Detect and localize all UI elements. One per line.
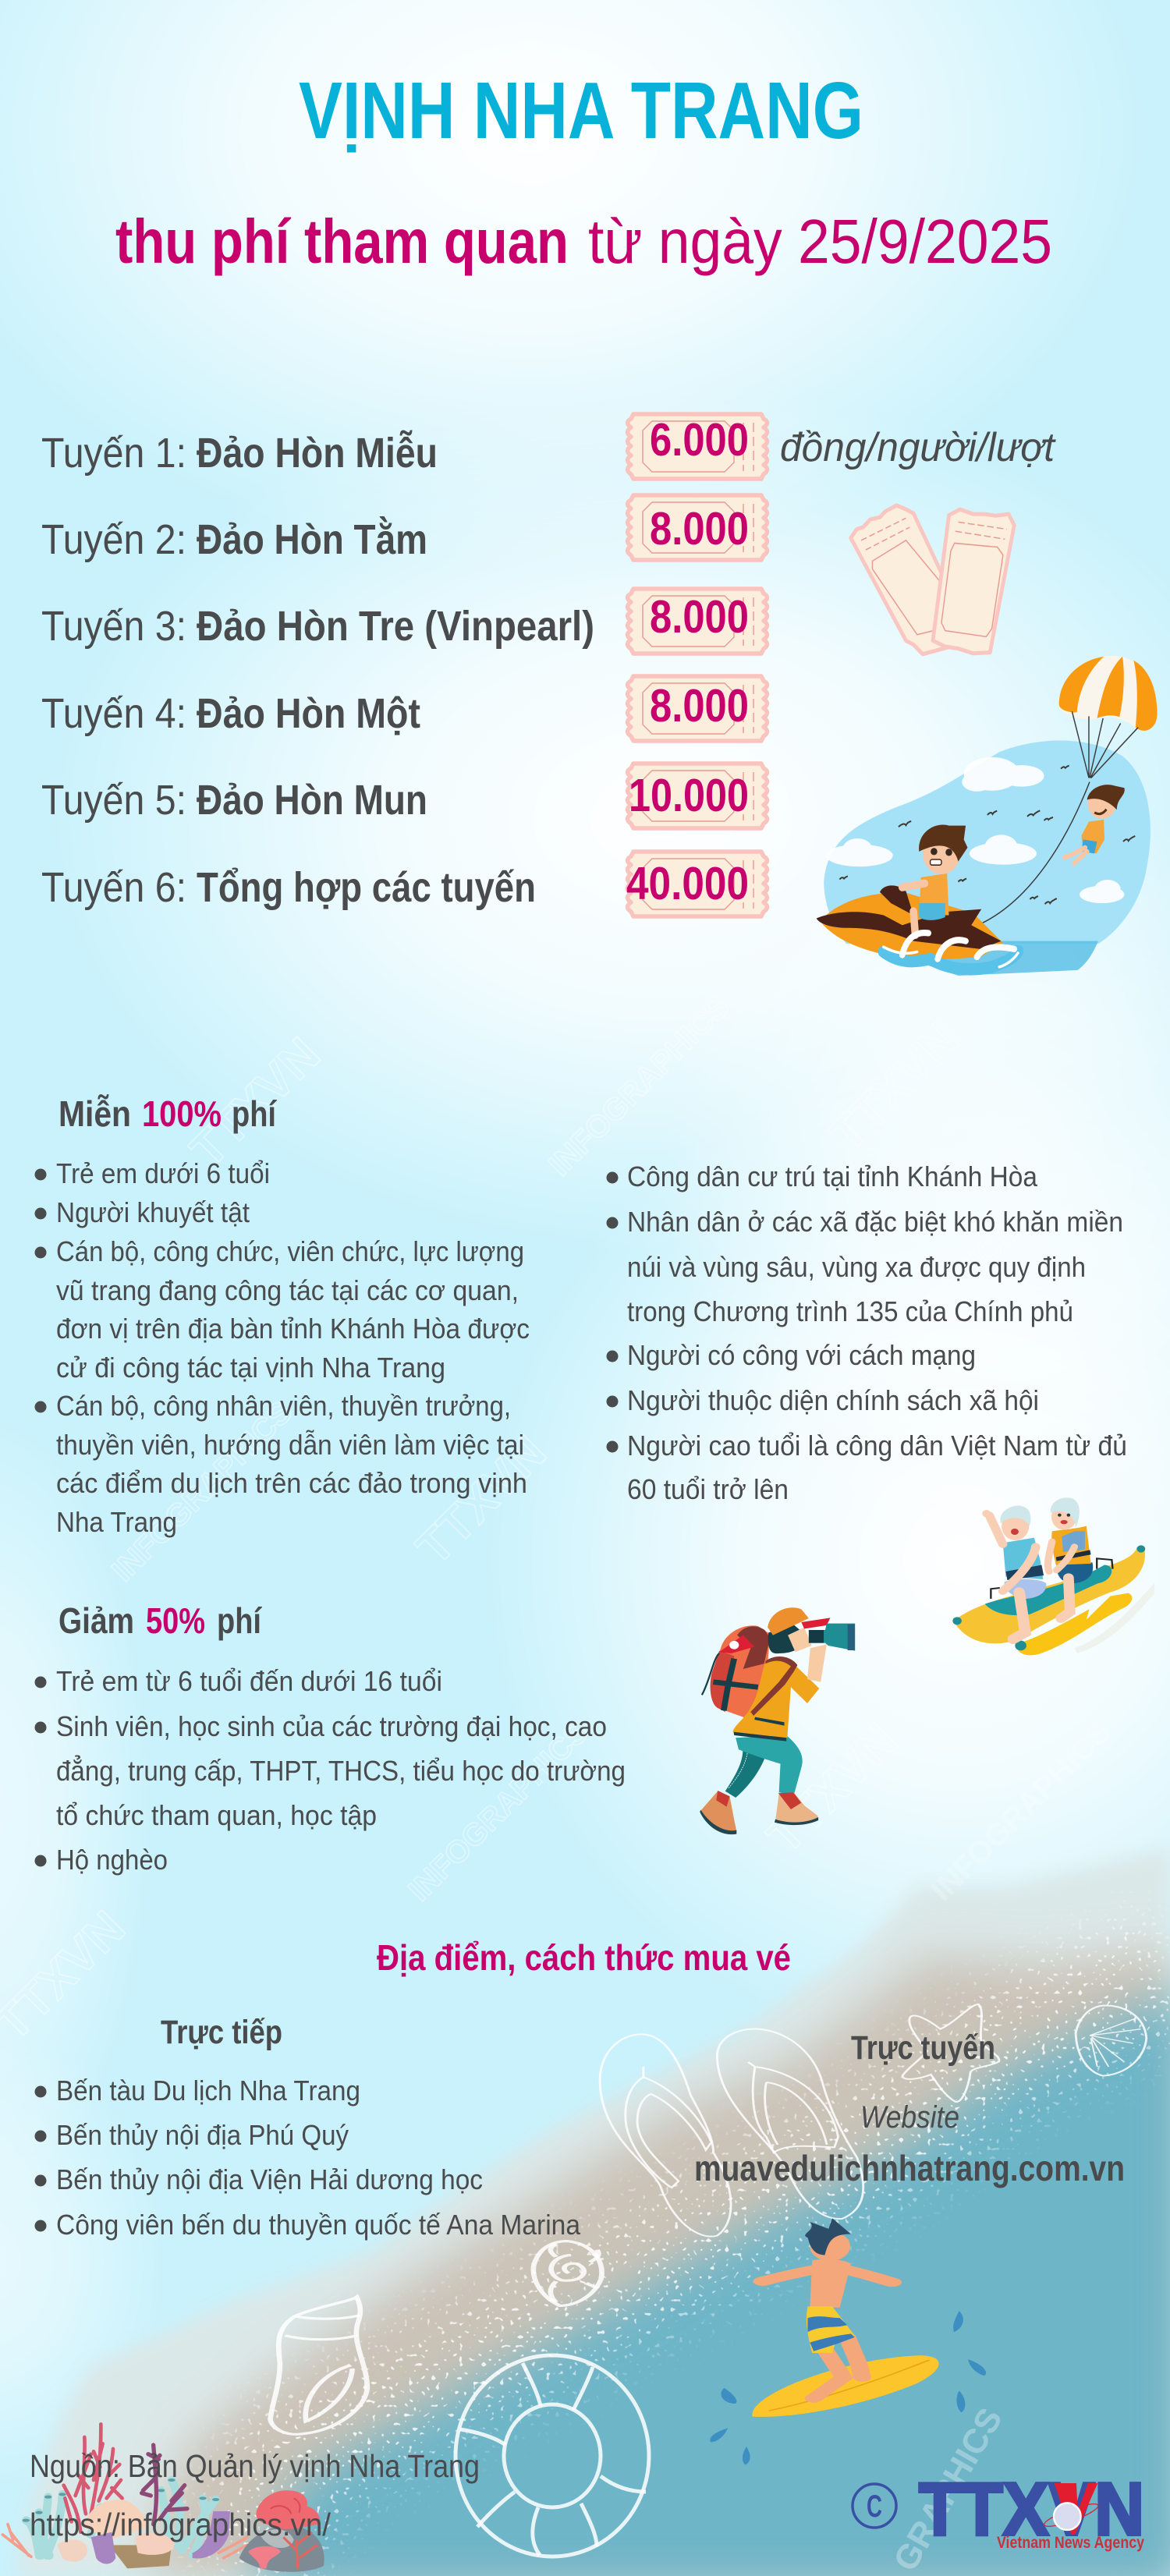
list: right column: Người thuộc diện chính sách xã hội: [627, 1384, 1039, 1416]
list: 50% discount: Sinh viên, học sinh của các trường đại học, cao: [56, 1710, 607, 1742]
route 5: Đảo Hòn Mun: [197, 777, 427, 824]
list: 50% discount: Trẻ em từ 6 tuổi đến dưới 16 tuổi: [56, 1665, 442, 1697]
route 1: [41, 430, 438, 477]
list: 50% discount: Hộ nghèo: [56, 1844, 168, 1876]
ticket: 6.000: [627, 414, 768, 479]
rider right: [1048, 1497, 1093, 1618]
purple tubes: [91, 2511, 230, 2564]
route 4: [41, 690, 420, 737]
subtitle: từ ngày 25/9/2025: [588, 207, 1052, 276]
watermarks: TTXVN: [180, 1027, 331, 1178]
wordmark: TTXVN: [919, 2468, 1144, 2551]
list: right column: Người cao tuổi là công dân Việt Nam từ đủ: [627, 1430, 1127, 1462]
illustration: corals: [2, 2424, 324, 2572]
heading: 50% discount: [58, 1600, 263, 1641]
ticket: 8.000 route 3: [627, 589, 768, 654]
list: right column: [607, 1160, 1127, 1505]
jacket: [732, 1658, 819, 1738]
list: left column: các điểm du lịch trên các đảo trong vịnh: [56, 1467, 527, 1499]
list: direct: [34, 2075, 581, 2241]
route 3: [41, 603, 594, 650]
teal tubes left: [26, 2480, 216, 2556]
source: Nguồn: Bản Quản lý vịnh Nha Trang: [30, 2448, 480, 2484]
arm: [807, 1644, 827, 1682]
agency name: Vietnam News Agency: [997, 2534, 1144, 2552]
icon: spiral shell and conch: [270, 2241, 602, 2434]
grey rock: [239, 2525, 324, 2572]
shells and rock: [83, 2500, 148, 2540]
icon: flip flops and starfish and scallop: [600, 2004, 1147, 2237]
heading: 50% discount: phí: [217, 1600, 263, 1641]
purple branching coral: [142, 2445, 187, 2525]
illustration: jet ski and parasailing: [817, 656, 1158, 976]
subtitle: thu phí tham quan: [115, 207, 569, 276]
label: website: Website: [860, 2100, 959, 2135]
watermarks: GRAPHICS: [886, 2401, 1010, 2576]
rider left: [982, 1506, 1046, 1639]
ticket: 6.000: 6.000: [650, 414, 749, 466]
watermarks: INFOGRAPHICS: [105, 1394, 299, 1588]
parasailer: [1065, 785, 1125, 863]
list: left column: Người khuyết tật: [56, 1196, 250, 1228]
heading: Miễn: [58, 1093, 131, 1134]
route 2: [41, 516, 427, 563]
list: left column: cử đi công tác tại vịnh Nha Trang: [56, 1352, 445, 1384]
splash: [1075, 1583, 1154, 1653]
subtitle: [115, 207, 1052, 276]
route 3: Tuyến 3:: [41, 603, 186, 650]
route 6: Tuyến 6:: [41, 864, 186, 911]
waves: [884, 933, 1018, 969]
illustration: seniors on banana boat: [952, 1497, 1154, 1655]
backpack: [702, 1625, 770, 1720]
route 2: Đảo Hòn Tằm: [197, 516, 427, 563]
list: right column: trong Chương trình 135 của Chính phủ: [627, 1295, 1073, 1327]
banana body: [954, 1547, 1145, 1643]
list: left column: Nha Trang: [56, 1506, 177, 1538]
lower tube: [1016, 1593, 1132, 1655]
list: 50% discount: [34, 1665, 626, 1876]
front leg: [736, 1735, 803, 1795]
tube caps: [23, 2479, 219, 2522]
list: left column: [34, 1157, 530, 1538]
watermarks: TTXVN: [820, 1012, 970, 1162]
ticket: 8.000 route 3: 8.000: [650, 591, 749, 643]
heading: 50% discount: 50%: [146, 1600, 205, 1641]
list: right column: Công dân cư trú tại tỉnh Khánh Hòa: [627, 1160, 1038, 1192]
birds: [839, 766, 1135, 904]
logo: TTXVN: [853, 2468, 1144, 2552]
title: VỊNH NHA TRANG: [299, 66, 863, 155]
heading: where to buy: Địa điểm, cách thức mua vé: [377, 1937, 791, 1978]
heading: direct: Trực tiếp: [161, 2014, 282, 2051]
head and hair: [810, 2231, 850, 2261]
panel: routes and prices: [41, 414, 1056, 916]
sky blob: [824, 741, 1150, 944]
ticket: 8.000 route 4: 8.000: [650, 680, 749, 732]
heading: 50% discount: Giảm: [58, 1600, 134, 1641]
handles: [991, 1558, 1112, 1599]
route 3: Đảo Hòn Tre (Vinpearl): [197, 603, 594, 650]
surfboard: [752, 2355, 939, 2417]
route 4: Đảo Hòn Một: [197, 690, 420, 737]
ticket: 8.000 route 2: 8.000: [650, 503, 749, 555]
route 5: Tuyến 5:: [41, 777, 186, 824]
red coral blob: [256, 2490, 320, 2529]
list: right column: Người có công với cách mạng: [627, 1339, 976, 1371]
route 4: Tuyến 4:: [41, 690, 186, 737]
list: left column: Trẻ em dưới 6 tuổi: [56, 1157, 270, 1189]
list: right column: 60 tuổi trở lên: [627, 1473, 789, 1505]
heading: online: Trực tuyến: [851, 2029, 995, 2067]
route 6: Tổng hợp các tuyến: [197, 864, 536, 911]
copyright symbol: [853, 2484, 896, 2528]
copyright symbol: C: [867, 2489, 882, 2524]
list: direct: Bến tàu Du lịch Nha Trang: [56, 2075, 360, 2107]
ticket: 40.000: 40.000: [626, 858, 749, 909]
list: right column: Nhân dân ở các xã đặc biệt khó khăn miền: [627, 1206, 1123, 1238]
shorts: [807, 2306, 855, 2353]
clouds: [826, 757, 1124, 903]
heading: 100%: [142, 1093, 222, 1134]
jet ski: [817, 885, 1003, 961]
watermarks: INFOGRAPHICS: [402, 1714, 595, 1908]
heading: phí: [232, 1093, 278, 1134]
illustration: photographer: [700, 1607, 855, 1834]
droplets: [710, 2311, 986, 2464]
red V and globe: [1042, 2483, 1100, 2534]
boots: [700, 1791, 818, 1834]
route 2: Tuyến 2:: [41, 516, 186, 563]
parachute: [1059, 656, 1158, 778]
watermarks: TTXVN: [406, 1425, 557, 1575]
list: left column: đơn vị trên địa bàn tỉnh Khánh Hòa được: [56, 1313, 530, 1345]
watermarks: [0, 989, 1118, 2576]
ticket: 8.000 route 4: [627, 676, 768, 741]
list: left column: Cán bộ, công nhân viên, thuyền trưởng,: [56, 1390, 511, 1422]
ticket: 10.000: 10.000: [629, 770, 749, 821]
panel: 100% exemption: [34, 1093, 1127, 1538]
icon: two tickets: [851, 505, 1014, 654]
legs: [814, 2337, 862, 2398]
rope: [973, 782, 1090, 927]
url: infographics: https://infographics.vn/: [30, 2507, 332, 2542]
route 1: Tuyến 1:: [41, 430, 186, 477]
icon: swim ring: [456, 2355, 649, 2557]
list: direct: Bến thủy nội địa Viện Hải dương học: [56, 2163, 483, 2195]
watermarks: INFOGRAPHICS: [831, 1215, 1024, 1408]
list: left column: Cán bộ, công chức, viên chức, lực lượng: [56, 1235, 524, 1267]
sea strip: [921, 941, 1098, 976]
unit label: đồng/người/lượt: [780, 425, 1056, 470]
route 5: [41, 777, 427, 824]
list: direct: Công viên bến du thuyền quốc tế Ana Marina: [56, 2209, 581, 2241]
illustration: surfer: [710, 2218, 986, 2464]
head: [768, 1607, 830, 1653]
list: 50% discount: đẳng, trung cấp, THPT, THCS, tiểu học do trường: [56, 1754, 626, 1787]
ticket: 8.000 route 2: [627, 495, 768, 560]
list: left column: vũ trang đang công tác tại các cơ quan,: [56, 1274, 519, 1306]
small orange coral left: [2, 2525, 247, 2558]
watermarks: INFOGRAPHICS: [924, 1714, 1118, 1908]
camera: [809, 1624, 855, 1651]
driver: [902, 825, 967, 935]
route 1: Đảo Hòn Miễu: [197, 430, 438, 477]
watermarks: INFOGRAPHICS: [542, 989, 736, 1182]
route 6: [41, 864, 536, 911]
pink branching coral: [64, 2424, 122, 2532]
watermarks: TTXVN: [757, 1713, 908, 1864]
back leg: [725, 1742, 767, 1798]
list: left column: thuyền viên, hướng dẫn viên làm việc tại: [56, 1429, 524, 1461]
list: 50% discount: tổ chức tham quan, học tập: [56, 1799, 377, 1831]
list: right column: núi và vùng sâu, vùng xa được quy định: [627, 1251, 1086, 1283]
heading: [58, 1093, 278, 1134]
list: direct: Bến thủy nội địa Phú Quý: [56, 2119, 349, 2151]
torso and arms: [810, 2259, 851, 2308]
icons: white beach outlines: [270, 2004, 1147, 2557]
